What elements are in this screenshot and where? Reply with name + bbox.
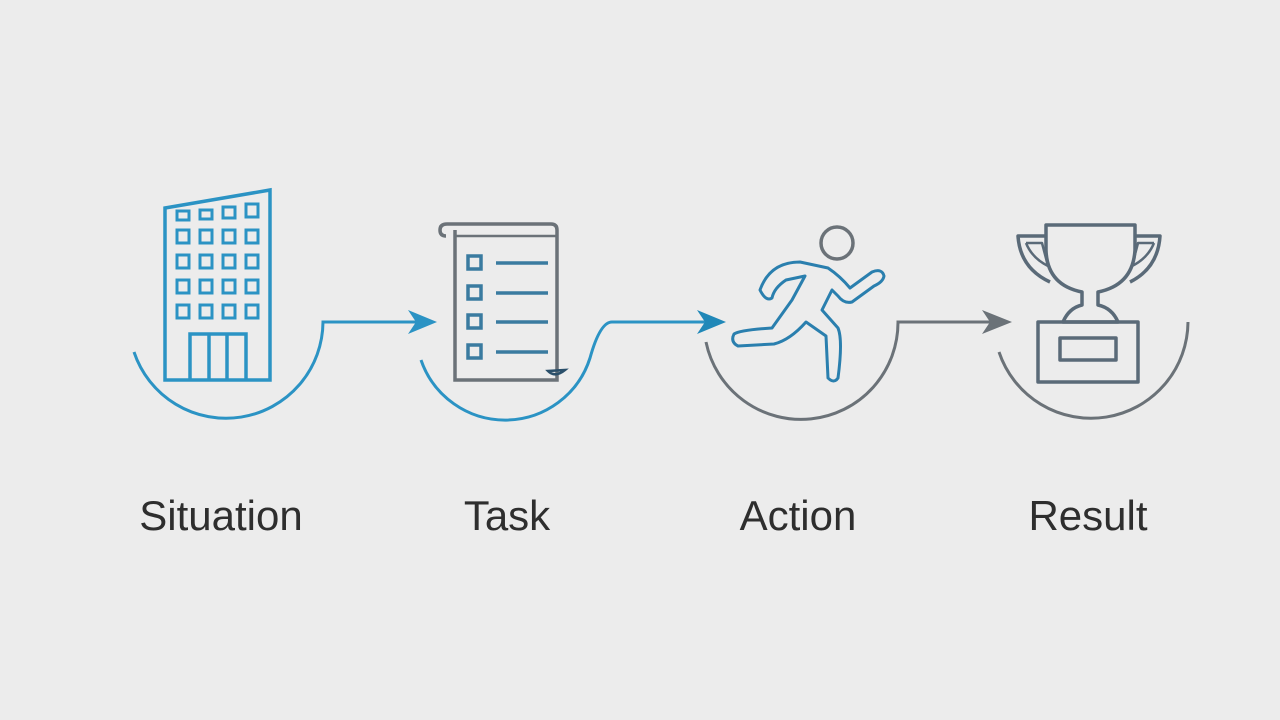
icon: runner [733,227,884,381]
arc: action connector [706,322,1003,419]
step: situation [134,190,437,539]
step: task [421,224,726,539]
arrow: task to action [697,310,726,334]
label: task: Task [464,492,551,539]
arrow: situation to task [408,310,437,334]
arc: result connector [999,322,1188,418]
step: action [706,227,1012,539]
label: action: Action [740,492,856,539]
icon: checklist [440,224,565,380]
arc: situation connector [134,322,430,418]
arc: task connector [421,322,718,420]
label: result: Result [1028,492,1148,539]
arrow: action to result [982,310,1012,334]
label: situation: Situation [139,492,303,539]
step: result [999,225,1188,539]
icon: building [165,190,270,380]
icon: trophy [1018,225,1160,382]
